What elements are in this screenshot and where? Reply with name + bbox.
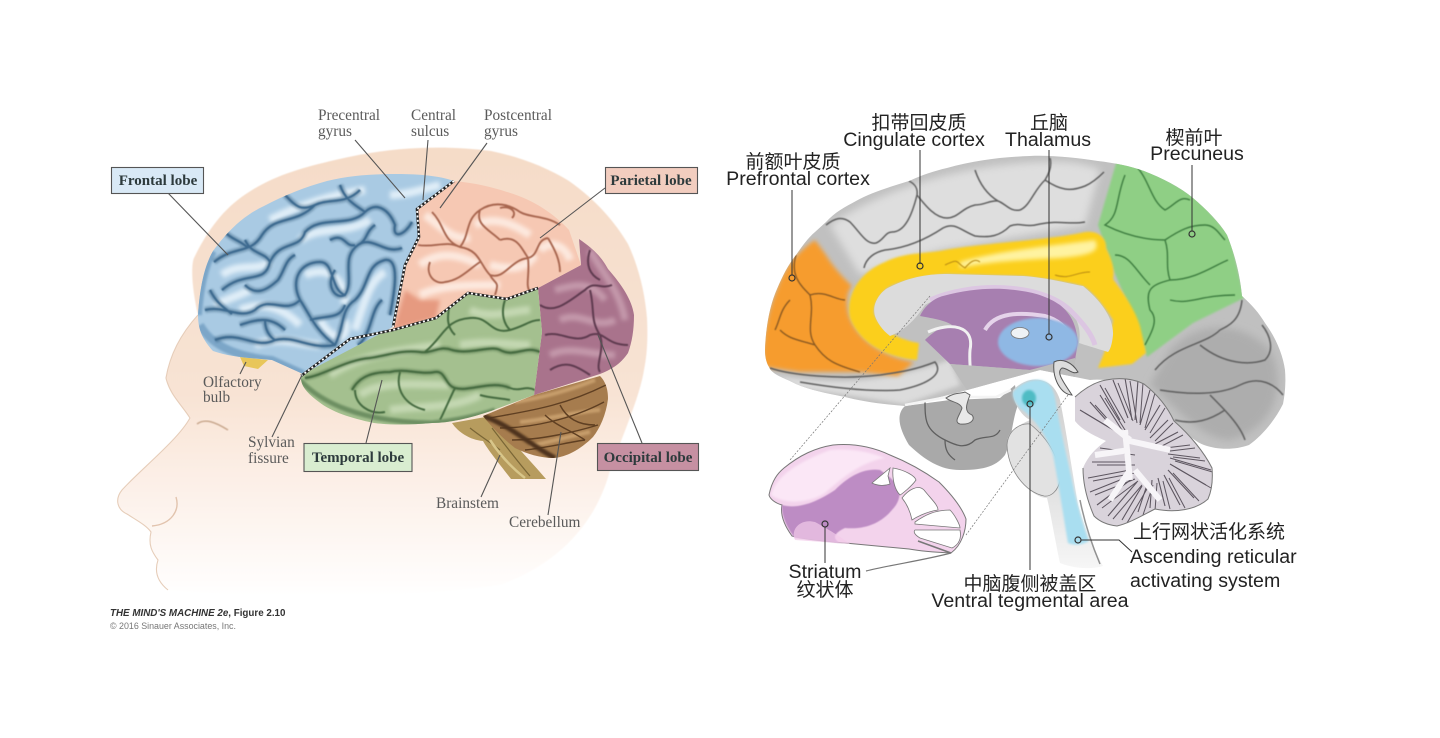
label: Brainstem: Brainstem: [436, 495, 499, 512]
purple ventricle region: [920, 289, 1078, 370]
sulci lines: [770, 158, 1283, 440]
temporal lobe: [295, 285, 545, 427]
label: ascending reticular activating system: activating system: [1130, 570, 1280, 592]
reticular activating system cyan band: [1013, 380, 1089, 545]
occipital lobe: [534, 239, 634, 395]
thalamus: [998, 318, 1078, 366]
label: Sylvian fissure: [248, 375, 302, 467]
orange prefrontal region: [763, 240, 914, 376]
label: Parietal lobe: Parietal lobe: [610, 173, 692, 189]
brainstem: [1007, 380, 1103, 568]
label: thalamus: Thalamus: [1005, 129, 1091, 151]
brainstem: [452, 416, 546, 479]
label: Central sulcus: [411, 107, 456, 200]
label: striatum: [789, 521, 951, 601]
head silhouette: [118, 148, 647, 597]
label: precuneus: 楔前叶: [1165, 127, 1223, 149]
eye: [197, 421, 228, 430]
label: Cerebellum: Cerebellum: [509, 514, 580, 531]
right panel: medial brain illustration: [726, 112, 1297, 612]
label: Central sulcus: Central: [411, 107, 456, 124]
label: Sylvian fissure: fissure: [248, 450, 289, 467]
figure credit: [110, 608, 286, 631]
label: cingulate cortex: 扣带回皮质: [871, 112, 967, 134]
label: Temporal lobe: Temporal lobe: [312, 450, 405, 466]
label: Frontal lobe: Frontal lobe: [119, 173, 198, 189]
green precuneus region: [1098, 160, 1244, 357]
label: Cerebellum: [509, 432, 580, 531]
label: Precentral gyrus: gyrus: [318, 123, 352, 140]
label: ascending reticular activating system: 上行网状活化系统: [1133, 521, 1285, 543]
label: cingulate cortex: [843, 112, 985, 269]
white ventricle path between frontal and temporal: [905, 390, 1011, 405]
diencephalon base: [950, 358, 1075, 390]
label: ventral tegmental area: [931, 401, 1129, 612]
label: Olfactory bulb: Olfactory: [203, 374, 262, 391]
label: prefrontal cortex: [726, 151, 870, 281]
label: Parietal lobe: [540, 168, 698, 238]
figure credit: © 2016 Sinauer Associates, Inc.: [110, 621, 236, 631]
label: Temporal lobe: [304, 380, 412, 472]
label: precuneus: [1150, 127, 1244, 237]
frontal lobe: [195, 170, 457, 380]
label: Occipital lobe: [598, 335, 698, 470]
face profile line: [118, 315, 198, 590]
parietal lobe: [390, 178, 585, 333]
left panel: lateral brain illustration: [110, 107, 698, 631]
label: Precentral gyrus: [318, 107, 405, 198]
label: Postcentral gyrus: [440, 107, 552, 208]
label: Olfactory bulb: [203, 362, 262, 406]
figure credit: THE MIND'S MACHINE 2e, Figure 2.10: [110, 608, 286, 619]
striatum inset: [769, 444, 966, 553]
cerebellum: [483, 376, 608, 458]
label: ascending reticular activating system: Ascending reticular: [1130, 546, 1297, 568]
label: thalamus: [1005, 112, 1091, 340]
zoom connector lines: [790, 296, 1068, 535]
label: Olfactory bulb: bulb: [203, 389, 231, 406]
label: Postcentral gyrus: Postcentral: [484, 107, 552, 124]
label: prefrontal cortex: Prefrontal cortex: [726, 168, 870, 190]
label: thalamus: 丘脑: [1030, 112, 1068, 134]
label: ventral tegmental area: 中脑腹侧被盖区: [963, 573, 1097, 595]
label: Sylvian fissure: Sylvian: [248, 434, 295, 451]
label: Postcentral gyrus: gyrus: [484, 123, 518, 140]
label: prefrontal cortex: 前额叶皮质: [745, 151, 841, 173]
corpus callosum: [874, 274, 1113, 352]
label: striatum: Striatum: [789, 561, 861, 583]
cerebrum medial surface: [760, 150, 1290, 460]
label: ventral tegmental area: Ventral tegmental area: [931, 590, 1129, 612]
fornix band: [983, 312, 1066, 331]
nostril: [152, 497, 177, 526]
lobe borders: dotted boundaries: [301, 181, 538, 376]
olfactory bulb: [240, 357, 268, 369]
label: Frontal lobe: [112, 168, 228, 255]
temporal lobe underside: [899, 385, 1018, 470]
label: precuneus: Precuneus: [1150, 143, 1244, 165]
cerebellum arbor vitae: [1075, 379, 1212, 526]
yellow cingulate cortex: [849, 232, 1146, 368]
label: striatum: 纹状体: [796, 579, 854, 601]
superior colliculus and pineal: [1054, 360, 1078, 395]
label: ascending reticular activating system: [1075, 521, 1297, 592]
label: cingulate cortex: Cingulate cortex: [843, 129, 985, 151]
label: Central sulcus: sulcus: [411, 123, 449, 140]
label: Brainstem: [436, 455, 500, 512]
label: Occipital lobe: Occipital lobe: [604, 450, 693, 466]
label: Precentral gyrus: Precentral: [318, 107, 380, 124]
